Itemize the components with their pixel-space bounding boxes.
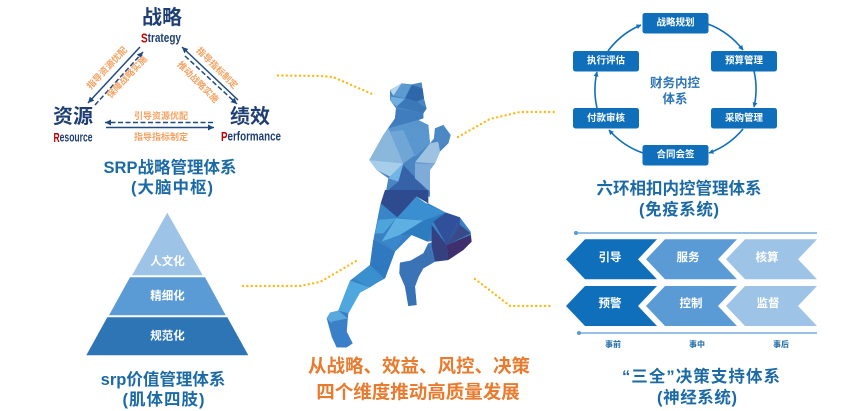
timeline labels: 事中 [689,339,705,349]
ring arrows [595,24,756,153]
timeline labels [605,339,789,349]
chevron: guide: 引导 [598,251,622,264]
arrows: resource and performance [105,122,214,128]
chevron: control: 控制 [680,296,702,310]
orange labels on arrows: 保障战略实施 [104,53,149,100]
heading: three-full decision support [622,366,780,407]
chevron: control [646,286,737,326]
icon: low-poly runner [327,82,472,347]
connector: bottom left [243,260,358,286]
step: strategic planning: 战略规划 [656,16,695,28]
arrows: strategy and performance [182,47,238,104]
connector: top left [278,76,372,94]
label: strategy: Strategy [141,30,182,45]
step: execution evaluation: 执行评估 [587,54,625,66]
step: budget management: 预算管理 [725,54,763,66]
orange labels on arrows: 引导资源优配 [134,110,188,121]
step: contract signing: 合同会签 [656,148,695,160]
chevron: service: 服务 [676,250,700,264]
tier: standardization: 规范化 [150,329,185,343]
orange labels on arrows: 指导指标制定 [134,131,188,142]
tier: culture: 人文化 [150,254,185,268]
ring center label [650,75,700,106]
tier: standardization [86,317,248,355]
chevron: service [646,239,737,279]
chevron: accounting [726,239,817,279]
label: strategy: 战略 [142,5,182,29]
orange labels on arrows: 指导指标制定 [194,45,240,91]
heading: six-ring system: 六环相扣内控管理体系 [596,178,762,198]
chevron: supervision [726,286,817,326]
chevron: warning: 预警 [598,296,622,310]
tier: refinement: 精细化 [150,289,185,303]
tier: refinement [109,277,226,315]
slogan [308,356,530,402]
pyramid chart [86,213,248,355]
heading: three-full decision support: “三全”决策支持体系 [622,366,780,386]
heading: SRP strategy system: SRP战略管理体系 [104,157,236,177]
connector: bottom right [475,279,552,306]
panel: SRP strategy triangle [53,5,281,144]
chevron: accounting: 核算 [756,250,778,264]
connector: top right [458,112,558,137]
orange labels on arrows: 推动战略实施 [175,59,221,105]
step: payment review [573,108,639,128]
label: resource: 资源 [53,105,93,128]
heading: srp value system [101,369,225,409]
runner lower body [327,190,472,347]
step: payment review: 付款审核 [587,112,625,124]
heading: SRP strategy system: (大脑中枢) [131,178,213,197]
step: procurement management: 采购管理 [725,112,763,124]
step: strategic planning [642,13,708,34]
heading: six-ring system [596,178,762,219]
orange labels on arrows [84,44,240,142]
bottom rule [578,332,817,334]
slogan: 从战略、效益、风控、决策 [308,356,530,376]
orange labels on arrows: 指导资源优配 [84,44,129,91]
timeline labels: 事前 [605,339,621,349]
label: performance: Performance [221,128,281,144]
heading: six-ring system: (免疫系统) [639,199,719,219]
step: procurement management [711,108,777,128]
step: contract signing [642,145,708,166]
label: resource: Resource [54,130,92,144]
label: performance: 绩效 [230,105,270,128]
ring diagram: six-link internal control [573,13,777,166]
timeline labels: 事后 [773,339,789,349]
heading: srp value system: (肌体四肢) [122,390,204,409]
label: performance [221,105,281,144]
runner upper body [369,82,451,197]
tier: culture [132,213,203,275]
heading: SRP strategy system [104,157,236,197]
slogan: 四个维度推动高质量发展 [316,382,520,402]
label: strategy [141,5,182,45]
heading: srp value system: srp价值管理体系 [101,369,225,389]
ring center label: 财务内控 [650,75,700,90]
arrows: strategy and resource [88,47,143,105]
label: resource [53,105,93,144]
chevron: warning [566,286,657,326]
step: budget management [711,51,777,72]
step: execution evaluation [573,51,639,72]
chevron: supervision: 监督 [756,296,780,310]
top rule [575,232,817,234]
chevron matrix [566,232,817,349]
ring center label: 体系 [662,91,688,106]
chevron: guide [566,239,657,279]
heading: three-full decision support: (神经系统) [657,387,737,407]
